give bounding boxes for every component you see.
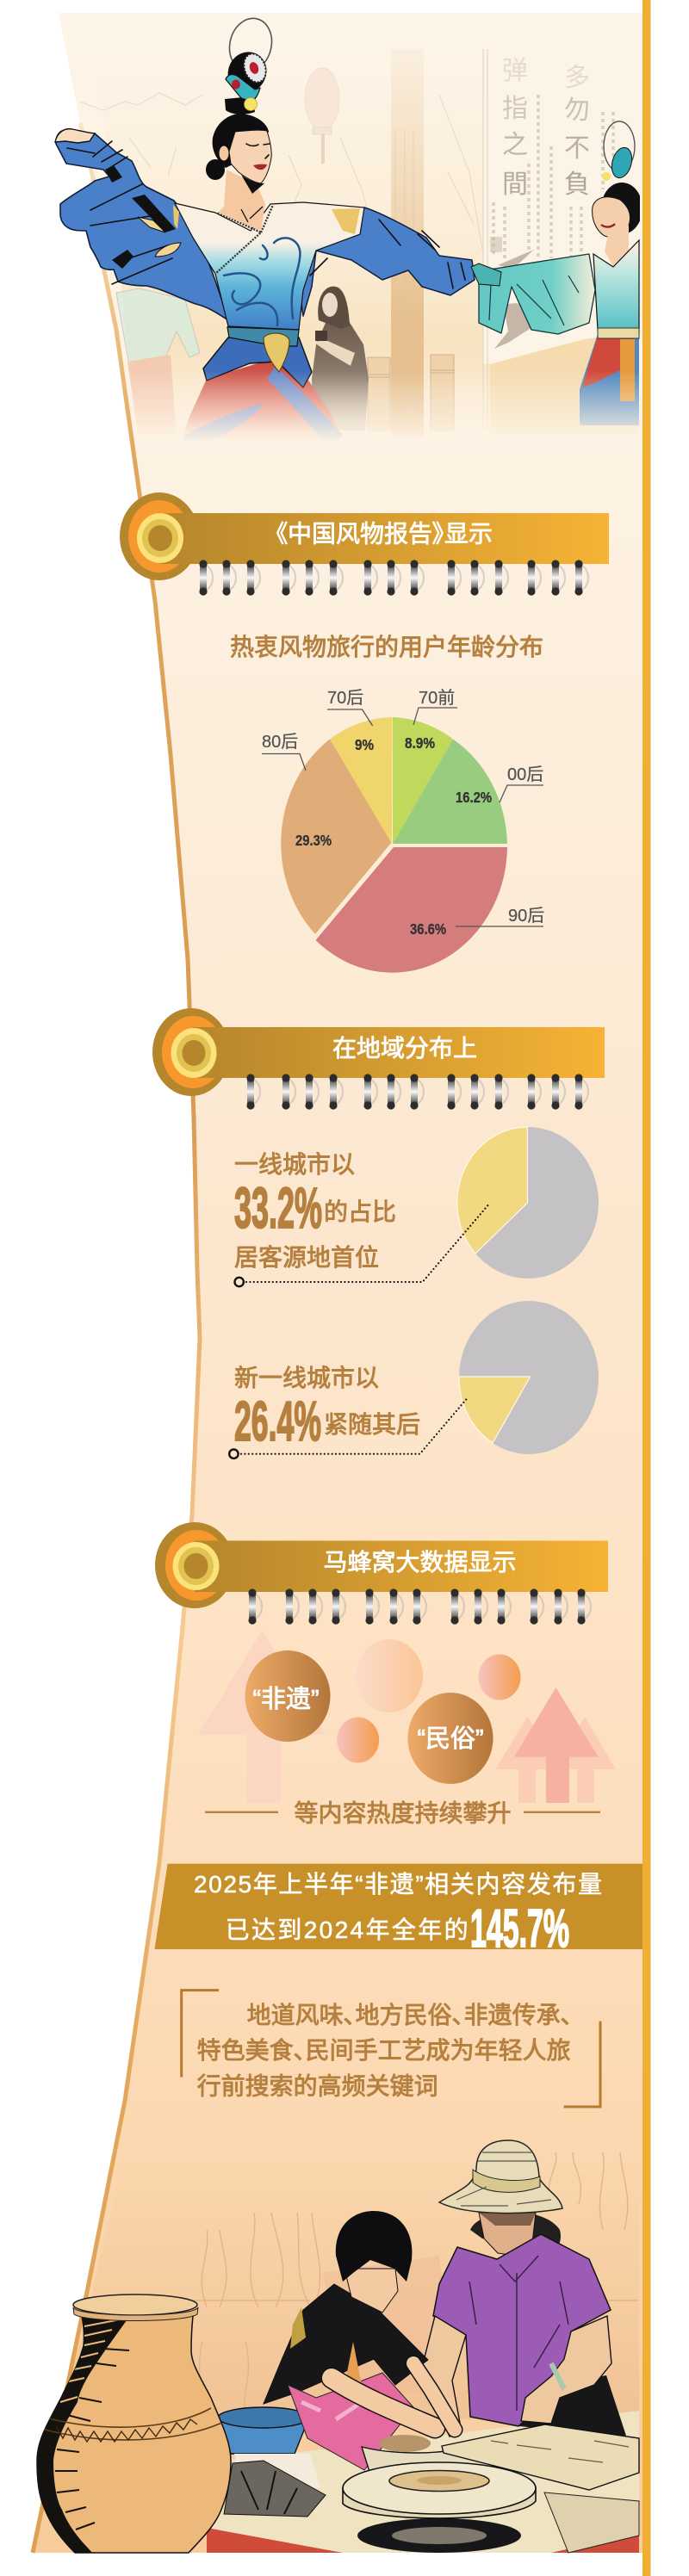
category labels: 70前 [419,688,455,708]
cuff [471,263,501,286]
hat lines [456,2152,551,2206]
flower [245,98,257,110]
bowl of clay [362,2433,512,2488]
clay vase [34,2294,231,2557]
shirt [264,2284,428,2404]
section header 2 [152,1008,605,1096]
category labels: 00后 [507,765,543,784]
right arm [521,2316,611,2424]
calligraphy scroll [483,49,642,430]
ring badge [120,492,199,580]
skirt [580,334,639,425]
belt [598,328,639,338]
calligraphy scroll: 間 [502,170,528,199]
second dancer [471,121,642,425]
corner brackets [182,1991,600,2107]
right gold bar [642,0,651,2576]
table side [544,2492,639,2553]
slice 90后 [315,847,507,973]
category labels: 70后 [327,688,363,708]
decorative band [39,2408,226,2440]
wall cracks [79,93,482,250]
bubble: small right [479,1655,520,1700]
bubble: 非遗 [245,1650,331,1742]
torso [175,202,364,330]
hand [55,129,95,143]
slice 00后 [393,739,507,844]
folds [489,276,579,325]
headdress [227,52,267,90]
arms [332,2378,435,2428]
pie: new first-tier cities [459,1301,599,1454]
binder rings 3 [248,1588,591,1625]
arrow: right back right [553,1717,616,1803]
background wall [121,159,593,401]
slice 70后 [330,717,393,844]
calligraphy scroll: 弹 [502,57,528,85]
percent labels [295,734,492,938]
main dancer [55,14,475,449]
keyword paragraph [182,1991,600,2107]
percent labels: 36.6% [410,920,446,938]
purple shirt [433,2234,611,2426]
face [593,197,630,237]
face [229,130,271,183]
binder rings 2 [246,1074,588,1110]
wood board [442,2424,639,2490]
title bar [193,1027,605,1078]
calligraphy scroll: 勿 [564,96,590,125]
rising heat caption: 等内容热度持续攀升 [294,1799,512,1827]
first-tier city text: 的占比 [324,1198,396,1225]
skirt red [582,336,633,387]
sleeve holes [138,217,181,257]
shoulder gold patches [173,205,360,234]
illustration: dancers scene [55,14,642,461]
halo [604,121,635,171]
face [479,2213,536,2256]
shirt folds [469,2256,568,2411]
hat [439,2140,562,2214]
skirt top [203,337,312,387]
buckle [264,333,289,372]
photographer [312,287,369,430]
illustration: pottery scene [34,2140,639,2557]
percent labels: 29.3% [295,832,332,849]
arrow: right front [514,1687,599,1803]
keyword paragraph: 特色美食、民间手工艺成为年轻人旅 [197,2037,571,2064]
new first-tier city text [234,1365,420,1452]
hair [336,2211,413,2282]
lantern [305,68,339,164]
hair [470,2212,561,2251]
calligraphy scroll: 不 [564,134,590,163]
bubble: 民俗: “民俗” [417,1725,484,1753]
bubble: small lower [337,1717,379,1763]
left sleeve [56,131,228,320]
first-tier city text [234,1151,396,1271]
heading: 在地域分布上 [332,1035,477,1062]
headdress [609,146,635,180]
dark strap and shadows [105,165,176,269]
collar stitching [215,205,273,274]
first-tier city text: 居客源地首位 [234,1244,379,1271]
calligraphy scroll: 之 [502,131,528,159]
keyword paragraph: 行前搜索的高频关键词 [197,2073,438,2100]
section header 1 [120,492,609,580]
callout band: 145.7% [470,1899,569,1959]
vase rim [73,2294,197,2315]
percent labels: 9% [355,736,374,753]
robe swirls [224,238,300,325]
ring badge [155,1522,234,1608]
top knot [225,96,255,115]
category labels: 90后 [508,906,544,926]
smile [601,224,615,227]
new first-tier city text: 26.4% [234,1390,321,1452]
face [344,2269,398,2313]
callout band: 已达到2024年全年的 [226,1917,469,1943]
hair [213,114,269,168]
callout band: 2025年上半年“非遗”相关内容发布量 [194,1871,602,1898]
wheel base [357,2518,521,2553]
heading: 《中国风物报告》显示 [276,520,493,548]
chin shadow [241,175,264,194]
category labels: 80后 [262,732,298,752]
title bar [195,1541,608,1592]
new first-tier city text: 新一线城市以 [234,1365,379,1391]
eyes and lips [246,144,270,158]
bubble: top light [356,1639,423,1712]
first-tier city text: 33.2% [234,1176,322,1241]
sleeve [475,254,595,334]
hair [601,183,642,234]
halo ring [229,17,272,64]
right sleeve [300,207,475,316]
table cloth red [207,2528,639,2553]
pie chart: age distribution [262,688,544,973]
neck [605,226,629,267]
belt [227,327,299,346]
title bar [159,513,609,564]
calligraphy scroll: 多 [564,64,590,92]
pottery wheel [343,2462,536,2518]
chignon [206,159,225,180]
bottom fade [127,370,639,461]
neck [218,170,265,231]
ear [219,146,229,160]
left arm [422,2316,466,2437]
calligraphy scroll: 負 [564,170,590,199]
wooden posts [368,355,454,430]
sleeve folds [67,141,172,284]
category labels [262,688,544,926]
blue basin [218,2407,309,2454]
callout band [155,1864,642,1959]
percent labels: 8.9% [405,734,435,752]
binder rings 1 [199,560,588,596]
woman [422,2140,626,2437]
new first-tier city text: 紧随其后 [324,1411,420,1438]
percent labels: 16.2% [456,789,492,806]
pie: first-tier cities [457,1127,599,1279]
bubble: 民俗 [408,1693,493,1784]
keyword paragraph: 地道风味、地方民俗、非遗传承、 [247,2002,573,2028]
right sleeve folds [310,220,465,288]
ring badge [152,1008,230,1096]
cloth [224,2454,326,2517]
badge core [171,1028,217,1078]
pillar [391,49,424,437]
vase shading [34,2314,226,2557]
skirt blue sash [183,367,343,438]
badge core [172,1542,219,1590]
skirt red [184,362,336,434]
heading: 马蜂窝大数据显示 [323,1549,517,1576]
arrow: right back left [495,1717,559,1803]
slice 70前 [393,717,453,844]
arrow: left large [198,1631,326,1803]
dotted leader: first-tier [234,1205,487,1286]
background shelf with vases [62,2152,639,2419]
ghost dancer [116,288,200,435]
chart title: 热衷风物旅行的用户年龄分布 [230,634,543,660]
boy [264,2211,455,2470]
floor [490,337,639,430]
bangle [551,2363,564,2389]
trousers [518,2375,626,2436]
torso [593,240,639,331]
dotted leader: new first-tier [229,1399,467,1458]
table [207,2411,639,2553]
badge core [137,513,183,563]
calligraphy scroll: 指 [502,95,528,123]
panel left edge [33,123,200,2553]
section header 3 [155,1522,608,1608]
bubble: 非遗: “非遗” [252,1685,320,1713]
first-tier city text: 一线城市以 [234,1151,355,1178]
hat band [473,2170,540,2192]
slice 80后 [281,739,392,934]
apron [288,2373,413,2470]
